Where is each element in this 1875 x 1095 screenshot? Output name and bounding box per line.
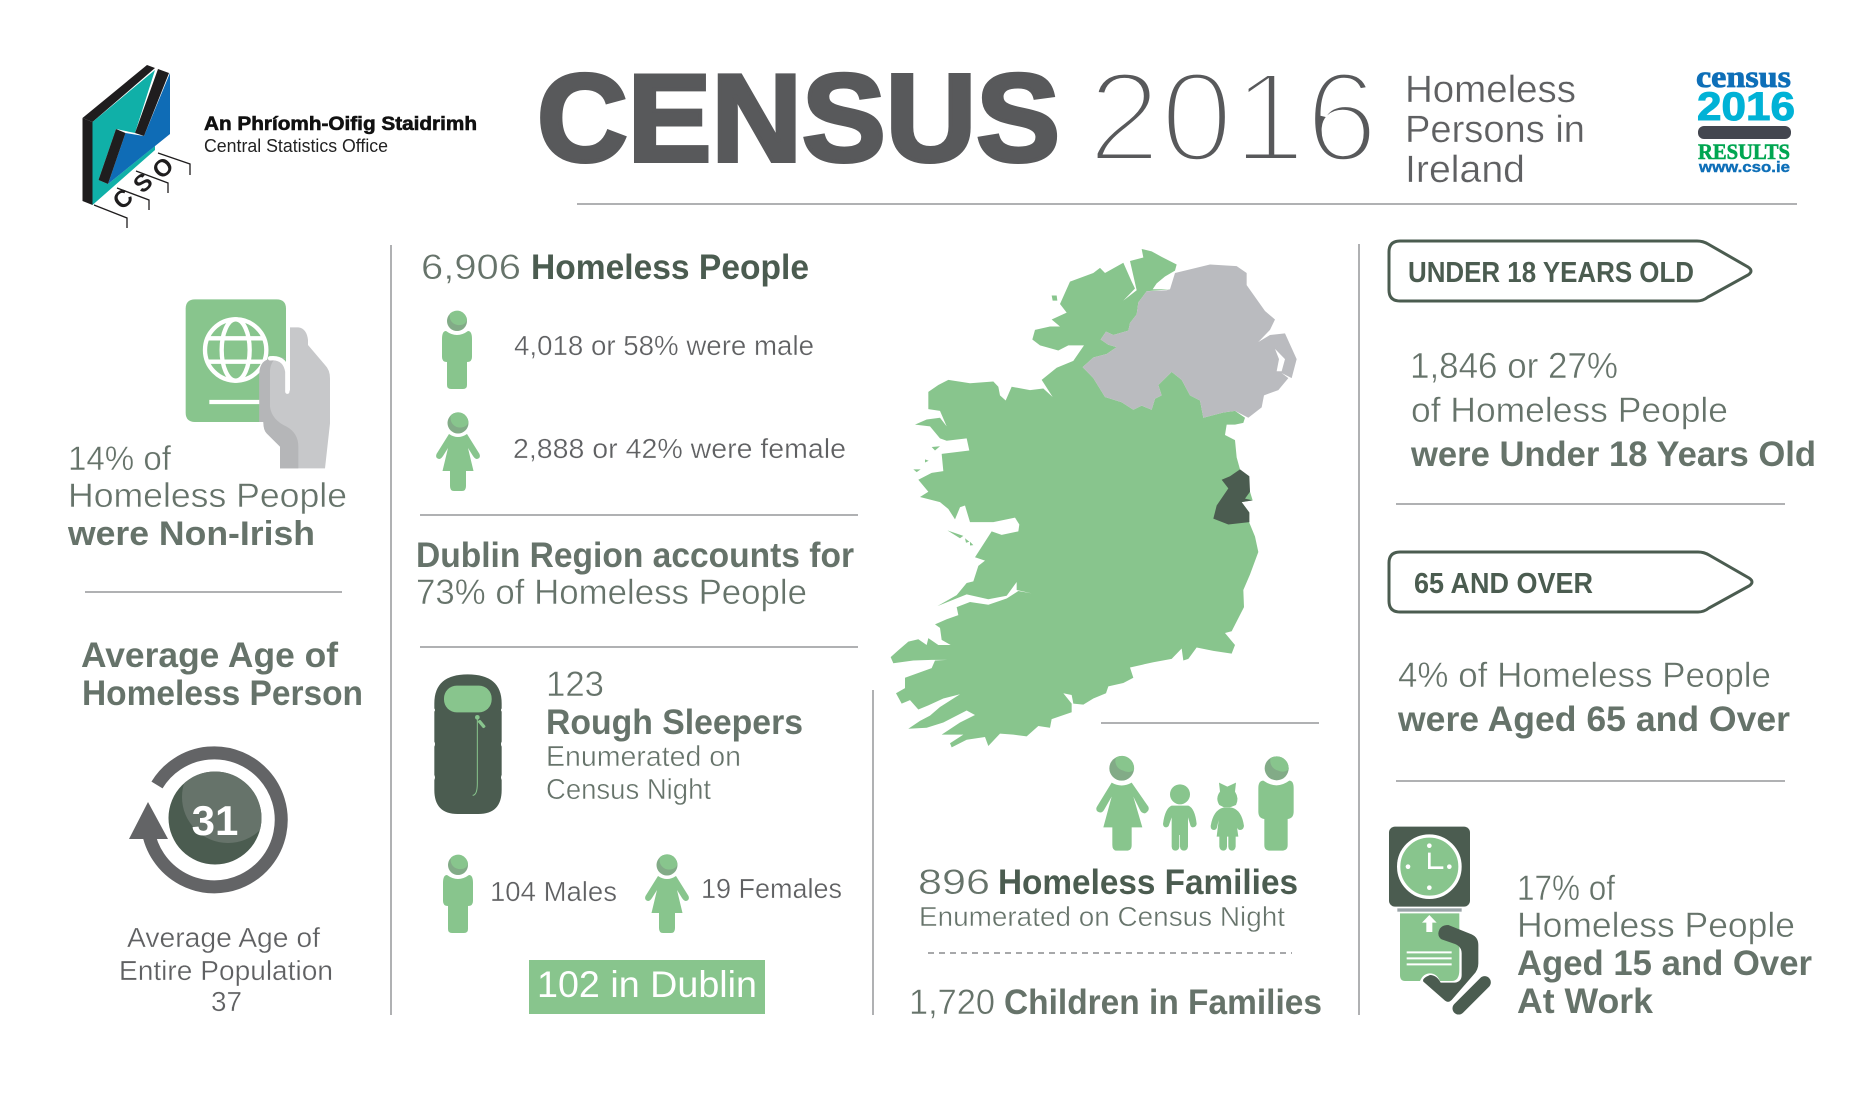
- text: homeless families: 896: [918, 863, 990, 902]
- heading: average age: [81, 636, 363, 713]
- text: homeless families: [918, 863, 1298, 932]
- arrow label: under 18: [1389, 241, 1751, 301]
- map: Dublin: [1213, 469, 1253, 524]
- icon: female: [436, 412, 480, 491]
- text: children in families: Children in Families: [1004, 983, 1322, 1022]
- text: 65 and over stat: [1397, 656, 1790, 739]
- logo: Central Statistics Office: S: [128, 168, 158, 199]
- icon: age circle with 31: [129, 751, 281, 887]
- text: Dublin region: 73% of Homeless People: [416, 573, 807, 612]
- subtitle: Ireland: [1405, 149, 1525, 191]
- logo: census 2016 results: census: [1696, 59, 1791, 94]
- text: 104 males: 104 Males: [490, 876, 617, 907]
- text: children in families: 1,720: [909, 983, 995, 1022]
- text: 14% non-Irish: [67, 440, 347, 553]
- heading: average age: Homeless Person: [82, 674, 363, 713]
- father: [1258, 756, 1294, 851]
- text: at work: Aged 15 and Over: [1517, 944, 1812, 983]
- heading: 6,906 homeless people: 6,906: [421, 248, 521, 287]
- subtitle: [1405, 69, 1585, 191]
- text: average age of entire population: [119, 922, 333, 1017]
- text: under 18 stat: of Homeless People: [1411, 391, 1728, 430]
- text: female count: 2,888 or 42% were female: [513, 433, 846, 464]
- arrow label: 65 and over: 65 AND OVER: [1414, 568, 1593, 600]
- mother: [1096, 756, 1149, 851]
- text: rough sleepers: 123: [546, 665, 604, 704]
- icon: male rough sleepers: [443, 855, 473, 933]
- arrow label: 65 and over: [1389, 552, 1752, 612]
- text: 65 and over stat: 4% of Homeless People: [1398, 656, 1771, 695]
- text: 14% non-Irish: Homeless People: [68, 477, 347, 515]
- text: average age of entire population: Entire Population: [119, 955, 333, 986]
- icon: male: [442, 311, 472, 389]
- logo: Central Statistics Office: C: [108, 184, 139, 215]
- text: rough sleepers: Rough Sleepers: [546, 703, 803, 742]
- map: islands: [913, 295, 1057, 546]
- subtitle: Persons in: [1405, 109, 1585, 151]
- map: Ireland: [891, 249, 1297, 747]
- girl: [1211, 783, 1244, 851]
- logo: census 2016 results: RESULTS: [1698, 139, 1790, 164]
- heading: 6,906 homeless people: Homeless People: [531, 248, 809, 287]
- icon: female rough sleepers: [645, 854, 689, 933]
- text: 14% non-Irish: 14% of: [68, 440, 172, 478]
- text: under 18 stat: were Under 18 Years Old: [1410, 435, 1816, 474]
- text: at work: [1517, 869, 1812, 1021]
- logo: Central Statistics Office: [82, 65, 190, 228]
- boy: [1163, 784, 1197, 851]
- logo: census 2016 results: www.cso.ie: [1698, 159, 1790, 176]
- text: 65 and over stat: were Aged 65 and Over: [1397, 700, 1790, 739]
- title: 2016: [1088, 46, 1378, 189]
- text: under 18 stat: 1,846 or 27%: [1410, 345, 1618, 386]
- icon: sleeping bag: [434, 674, 502, 814]
- icon: family: [1096, 756, 1294, 851]
- text: homeless families: Enumerated on Census Night: [919, 901, 1285, 932]
- logo: census 2016 results: [1696, 59, 1795, 176]
- text: at work: At Work: [1517, 982, 1654, 1021]
- logo text: office name: An Phríomh-Oifig Staidrimh: [204, 114, 477, 135]
- icon: clock-in card: [1389, 827, 1485, 1008]
- subtitle: Homeless: [1405, 69, 1576, 111]
- text: Dublin region: [416, 536, 854, 612]
- text: average age of entire population: 37: [211, 986, 242, 1017]
- callout: 102 in Dublin: 102 in Dublin: [537, 964, 757, 1005]
- map: Republic of Ireland: [891, 249, 1258, 747]
- text: at work: 17% of: [1517, 869, 1615, 908]
- arrow label: under 18: UNDER 18 YEARS OLD: [1408, 257, 1694, 289]
- text: average age of entire population: Average Age of: [127, 922, 320, 953]
- logo text: office name: Central Statistics Office: [204, 136, 388, 156]
- callout: 102 in Dublin: [529, 960, 765, 1014]
- heading: average age: Average Age of: [81, 636, 338, 675]
- logo: Central Statistics Office: O: [147, 152, 179, 185]
- text: at work: Homeless People: [1517, 906, 1795, 945]
- text: under 18 stat: [1410, 345, 1816, 474]
- text: male count: 4,018 or 58% were male: [514, 330, 814, 361]
- text: rough sleepers: Enumerated on: [546, 741, 741, 773]
- text: Dublin region: Dublin Region accounts for: [416, 536, 854, 575]
- text: homeless families: Homeless Families: [998, 863, 1298, 902]
- text: 14% non-Irish: were Non-Irish: [67, 515, 315, 553]
- icon: passport held in hand: [186, 299, 330, 468]
- title: CENSUS: [537, 50, 1060, 188]
- title: [537, 46, 1378, 189]
- logo: census 2016 results: 2016: [1697, 85, 1795, 129]
- map: Northern Ireland: [1083, 264, 1297, 418]
- text: rough sleepers: [546, 665, 803, 806]
- logo text: office name: [204, 114, 477, 156]
- text: 19 females: 19 Females: [701, 873, 842, 904]
- text: rough sleepers: Census Night: [546, 774, 711, 806]
- icon: age circle with 31: 31: [192, 797, 238, 844]
- heading: 6,906 homeless people: [421, 248, 809, 287]
